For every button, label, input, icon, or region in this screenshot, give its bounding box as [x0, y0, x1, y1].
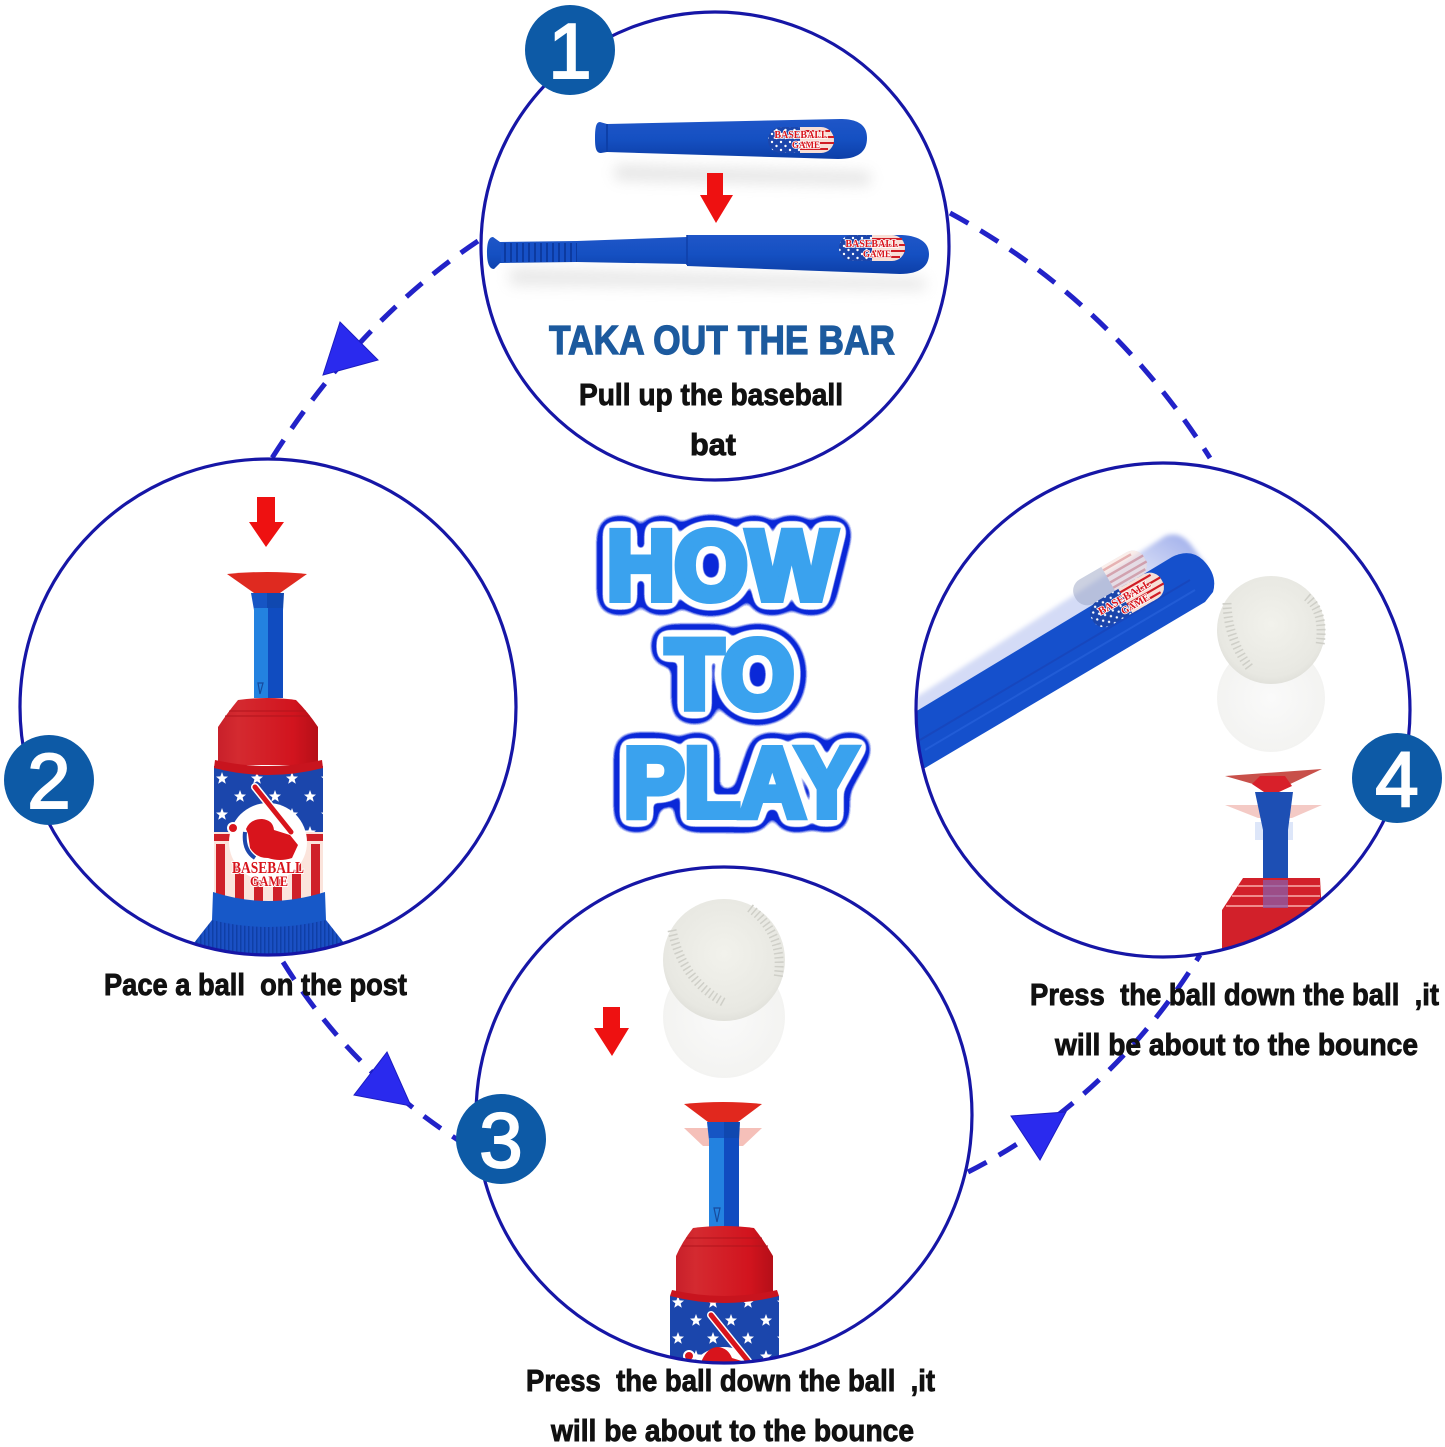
text: step 4 caption: will be about to the bounce — [1054, 1027, 1418, 1062]
text: step 1 instruction: bat — [690, 427, 736, 462]
badge: step 4: 4 — [1375, 735, 1419, 823]
illustration: balls — [1217, 576, 1325, 752]
illustration: launcher post: GAME — [250, 874, 288, 890]
icon: red arrow down — [700, 173, 733, 223]
badge: step 1: 1 — [548, 7, 592, 95]
text: step 3 caption: Press the ball down the ball ,it — [526, 1363, 935, 1398]
text: step 1 instruction: Pull up the baseball — [579, 377, 843, 412]
badge: step 2 — [4, 735, 94, 825]
panel: step 3 press ball — [476, 867, 972, 1421]
text: step 1 instruction — [579, 377, 843, 462]
icon: extended bat — [487, 235, 929, 290]
text: step 4 caption — [1030, 977, 1439, 1062]
dashed arrow: step 2 to step 3 — [283, 962, 458, 1140]
icon: extended bat: GAME — [863, 249, 891, 259]
title: how to play: HOW — [607, 511, 836, 620]
panel: step 2 place ball — [20, 459, 516, 960]
badge: step 4 — [1352, 733, 1442, 823]
icon: extended bat: BASEBALL — [845, 239, 899, 250]
icon: short bat: BASEBALL — [774, 130, 828, 141]
illustration: launcher post — [194, 572, 343, 954]
badge: step 3 — [456, 1094, 546, 1184]
illustration: swinging bat: BASEBALL — [1096, 578, 1153, 618]
text: step 2 caption: Pace a ball on the post — [104, 967, 407, 1002]
icon: short bat: GAME — [792, 140, 820, 150]
icon: red arrow down — [249, 497, 284, 547]
illustration: swinging bat: GAME — [1119, 592, 1152, 617]
title: how to play: PLAY — [624, 728, 857, 837]
title: how to play: TO — [666, 620, 794, 729]
text: step 3 caption — [526, 1363, 935, 1447]
text: step 3 caption: will be about to the bounce — [550, 1413, 914, 1447]
dashed line: step 4 back to step 1 — [950, 213, 1210, 458]
illustration: bat motion ghost — [915, 534, 1206, 725]
icon: red arrow down — [594, 1007, 629, 1056]
illustration: launcher post — [670, 1102, 779, 1362]
heading: take out the bar: TAKA OUT THE BAR — [549, 317, 895, 363]
dashed arrow: step 3 to step 4 — [968, 955, 1200, 1172]
badge: step 3: 3 — [479, 1096, 523, 1184]
illustration: swinging bat — [915, 546, 1214, 770]
illustration: launcher post — [1222, 769, 1322, 950]
dashed arrow: step 1 to step 2 — [272, 241, 478, 458]
badge: step 2: 2 — [27, 737, 71, 825]
illustration: balls — [663, 899, 785, 1078]
panel: step 1 take out the bat — [481, 12, 949, 480]
illustration: launcher post: BASEBALL — [232, 858, 304, 877]
badge: step 1 — [525, 5, 615, 95]
panel: step 4 bounce and hit — [915, 463, 1410, 957]
icon: short bat — [595, 119, 870, 185]
title: how to play — [607, 511, 857, 837]
